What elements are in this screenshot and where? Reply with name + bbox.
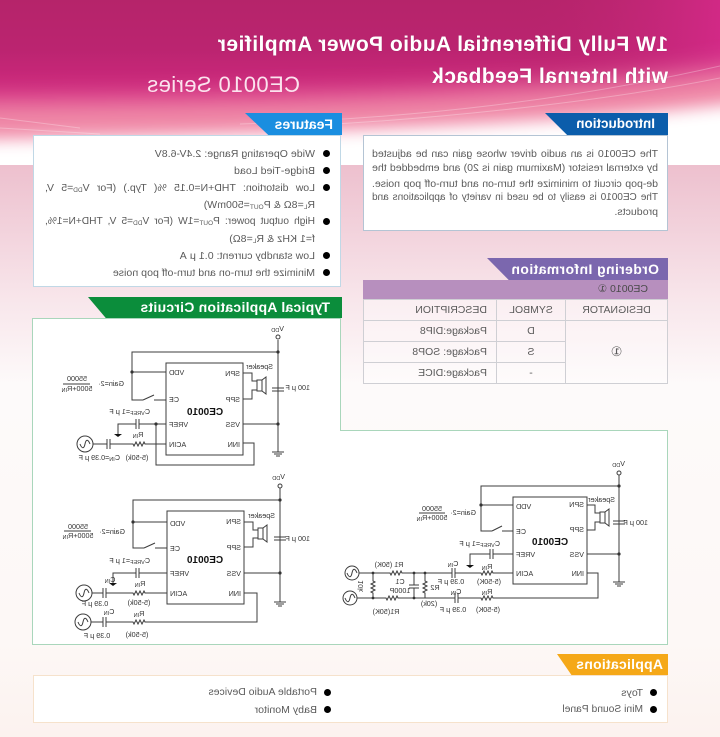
circuit 1: C (115, 453, 120, 462)
title (217, 33, 668, 88)
circuit 2 (63, 472, 310, 640)
circuit 3: 0.39 μ F (437, 577, 464, 586)
circuit 3: VREF (479, 543, 495, 549)
circuit 2: C (145, 556, 150, 565)
circuit 3: Speaker (588, 495, 615, 504)
circuit 1: V (279, 324, 284, 333)
circuit 3: IN (482, 591, 487, 597)
circuit 3: V (620, 459, 625, 468)
circuit 1: DD (271, 328, 279, 334)
circuit 2: (5-50k) (128, 598, 150, 607)
circuit 3: 10k (356, 580, 365, 592)
circuit 2: 55000 (68, 522, 88, 531)
circuit 2: R (139, 609, 144, 618)
subtitle: series name: CE0010 Series (147, 72, 300, 97)
table: ordering information: Package:DICE (418, 367, 487, 379)
panel: introduction: products. (614, 206, 658, 218)
circuit 1: (5-50k) (126, 453, 148, 462)
panel: applications (33, 675, 668, 723)
circuit 3: R2 (430, 583, 440, 592)
circuit 1: SPN (225, 369, 240, 378)
title: 1W Fully Differential Audio Power Amplifier (217, 33, 668, 56)
features list: High output power: POUT=1W (For VDD=5 V, THD+N=1%, (45, 216, 315, 227)
circuit 1: VDD (169, 368, 184, 377)
circuit 2: 100 μ F (285, 534, 310, 543)
table: ordering information: SYMBOL (509, 304, 553, 316)
circuit 2: 5000+R (68, 531, 93, 540)
circuit 1: VSS (225, 420, 240, 429)
circuit 1: IN (62, 388, 67, 394)
circuit 2: (5-50k) (126, 630, 148, 639)
table: ordering information: DESIGNATOR (582, 304, 651, 316)
circuit 1: Gain=2· (98, 379, 124, 388)
table: ordering information (363, 280, 668, 384)
panel: introduction: de-pop circuit to minimize the turn-on and turn-off pop noise. (372, 178, 658, 190)
part number row: CE0010 ① (598, 283, 648, 295)
circuit 2: 0.39 μ F (83, 631, 110, 640)
circuit 2: C (109, 607, 114, 616)
circuit 2: VSS (226, 569, 241, 578)
circuit 3: (5-50K) (476, 605, 500, 614)
heading: introduction (545, 113, 668, 135)
panel: introduction: The CE0010 is easily to be used in variety of applications and (372, 192, 658, 203)
circuit 2: IN (135, 583, 140, 589)
features list: Minimize the turn-on and turn-off pop noise (113, 267, 315, 279)
circuit 2: DD (272, 476, 280, 482)
circuit 1: =1 μ F (109, 407, 130, 416)
circuit 3: R (487, 562, 492, 571)
circuit 3: R (487, 587, 492, 596)
circuit 2: VREF (169, 569, 189, 578)
table: ordering information: ① (611, 344, 622, 359)
heading: introduction: Introduction (576, 116, 655, 131)
circuit 3: (5-50K) (477, 577, 501, 586)
circuit 3: R1(50K) (373, 607, 399, 616)
circuit 2: IN (105, 579, 110, 585)
circuit 1: INN (228, 440, 240, 449)
circuit 1: IN (109, 457, 115, 463)
application: portable audio devices: Portable Audio Devices (208, 687, 317, 698)
circuit 2: IN (134, 613, 139, 619)
circuit 3: C (495, 539, 500, 548)
circuit 2: CE (170, 544, 180, 553)
circuit 2: VDD (170, 519, 185, 528)
circuit 1 (62, 324, 310, 465)
features list: Low standby current: 0.1 μ A (180, 250, 315, 262)
panel: introduction (363, 135, 668, 231)
circuit 1: VREF (129, 411, 145, 417)
title: with Internal Feedback (432, 65, 668, 88)
circuit 2: IN (63, 535, 68, 541)
circuit 1: ACIN (169, 440, 186, 449)
circuit 2: R (140, 579, 145, 588)
part number row (363, 280, 668, 299)
circuit 2: =1 μ F (109, 556, 130, 565)
circuit 2: VREF (129, 560, 145, 566)
circuit 3: 100 μ F (623, 518, 648, 527)
circuit 1: 100 μ F (285, 383, 310, 392)
circuit 1: R (138, 430, 143, 439)
features list: f=1 KHz & RL=8Ω) (229, 233, 315, 245)
heading: features: Features (275, 116, 333, 132)
circuit 3: ACIN (516, 569, 533, 578)
circuit 3: IN (448, 563, 453, 569)
circuit 3: C1 (395, 577, 405, 586)
circuit 3 (343, 459, 648, 616)
circuit 1: IN (133, 434, 138, 440)
application: mini sound panel: Mini Sound Panel (562, 704, 643, 715)
circuit 3: IN (482, 566, 487, 572)
table: ordering information: Package: SOP8 (412, 346, 487, 358)
features list: RL=8Ω & POUT=500mW) (204, 199, 315, 211)
circuit 1: CE0010 (186, 407, 223, 418)
circuit 3: IN (417, 517, 422, 523)
circuit 3: CE (516, 527, 526, 536)
circuit 1: =0.39 μ F (78, 453, 109, 462)
circuit 2: INN (229, 589, 241, 598)
application: toys: Toys (621, 687, 643, 699)
circuit 3: SPP (569, 525, 584, 534)
circuit 3: DD (612, 463, 620, 469)
circuit 3: 55000 (422, 504, 442, 513)
table: ordering information: DESCRIPTION (415, 304, 487, 316)
table: ordering information: D (527, 325, 535, 337)
circuit 3: R1 (50K) (375, 560, 403, 569)
circuit 1: 55000 (67, 374, 87, 383)
circuit 3: CE0010 (531, 537, 568, 548)
circuit 2: CE0010 (186, 555, 223, 566)
heading: applications: Applications (576, 656, 663, 672)
circuit 2: C (110, 575, 115, 584)
features list (45, 148, 330, 279)
circuit 2: Speaker (248, 511, 275, 520)
circuit 2: IN (104, 611, 109, 617)
table: ordering information: S (528, 346, 535, 358)
table: ordering information: - (529, 367, 533, 379)
circuit 3: VSS (569, 550, 584, 559)
circuit 1: CE (169, 395, 179, 404)
heading: ordering information: Ordering Information (511, 261, 659, 277)
features list: Low distortion: THD+N=0.15 %( Typ.) (For VDD=5 V, (45, 182, 315, 194)
circuit 3: =1 μ F (459, 539, 480, 548)
heading: typical application circuits: Typical Application Circuits (140, 299, 330, 315)
circuit 2: V (280, 472, 285, 481)
circuit 1: 5000+R (67, 384, 92, 393)
panel: introduction: The CE0010 is an audio driver whose gain can be adjusted (372, 148, 658, 160)
heading: ordering information (487, 258, 668, 280)
circuit 1: Speaker (246, 362, 273, 371)
table: ordering information: Package:DIP8 (420, 325, 487, 337)
circuit 1: SPP (225, 395, 240, 404)
circuit 1: C (145, 407, 150, 416)
circuit 1: VREF (168, 420, 188, 429)
circuit 3: 1000P (389, 586, 410, 595)
circuit 3: Gain=2· (450, 508, 476, 517)
heading: features (245, 113, 342, 135)
heading: typical application circuits (88, 297, 342, 318)
application: baby monitor: Baby Monitor (255, 704, 317, 716)
circuit 3: 5000+R (422, 513, 447, 522)
circuit 3: C (453, 559, 458, 568)
application: toys (621, 687, 657, 699)
circuit 2: SPP (226, 543, 241, 552)
circuit 3: VREF (515, 550, 535, 559)
heading: applications (557, 654, 668, 675)
features list: Bridge-Tied Load (234, 165, 315, 177)
features list: Wide Operating Range: 2.4V-6.8V (155, 148, 315, 160)
circuit 3: IN (451, 591, 456, 597)
circuit 3: SPN (569, 500, 584, 509)
circuit 2: 0.39 μ F (81, 599, 108, 608)
circuit 2: ACIN (170, 589, 187, 598)
circuit 3: VDD (516, 502, 531, 511)
circuit 3: C (456, 587, 461, 596)
circuit 3: 0.39 μ F (439, 605, 466, 614)
circuit 3: (20k) (421, 599, 437, 608)
circuit 2: SPN (226, 517, 241, 526)
panel: introduction: by external resistor (Maximum gain is 20) and embedded the (372, 162, 658, 174)
circuit 2: Gain=2· (99, 527, 125, 536)
circuit 3: INN (572, 569, 584, 578)
panel: features (33, 135, 341, 287)
